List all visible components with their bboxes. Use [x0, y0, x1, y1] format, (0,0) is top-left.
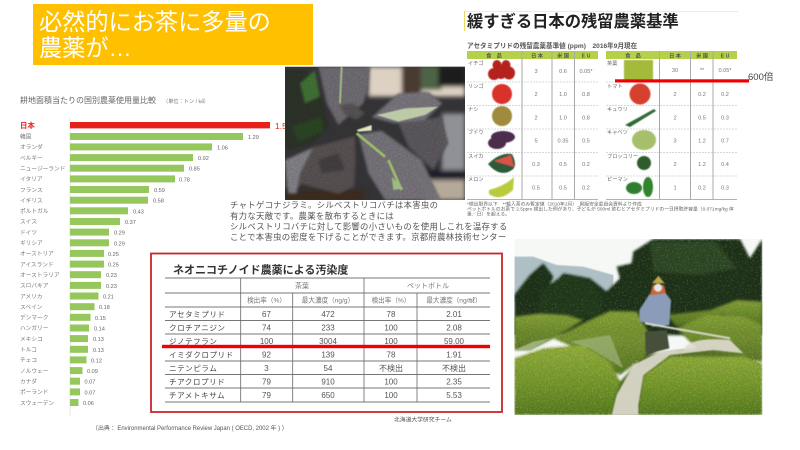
left table: fruit: 食 品 — [486, 52, 502, 60]
residue standards heading: 緩すぎる日本の残留農薬基準 — [467, 12, 679, 31]
column headers — [247, 281, 482, 304]
bars: other countries: オランダ — [20, 143, 43, 151]
left table: fruit: 2 — [534, 116, 538, 122]
table rows: 100 — [384, 324, 398, 332]
table rows: 3004 — [319, 337, 337, 346]
bars: other countries: 韓国 — [20, 132, 32, 140]
bars: other countries: スペイン — [20, 304, 43, 311]
table rows: 100 — [260, 337, 274, 346]
table footnote: *検出限界以下 **輸入茶のみ暫定値（2010年2月） 県版安全委員会資料より作成 — [467, 200, 642, 208]
right table: vegetables and tea: 0.2 — [698, 92, 706, 98]
table rows: 不検出 — [442, 363, 466, 373]
right table: vegetables and tea: キャベツ — [607, 129, 628, 136]
bars: other countries: 0.29 — [114, 241, 125, 247]
bar: Japan: 1.5 — [275, 121, 287, 131]
right table: vegetables and tea: 日 本 — [669, 52, 682, 60]
left table: fruit: 米 国 — [557, 52, 569, 60]
table rows: ニテンピラム — [169, 364, 217, 373]
bars: other countries: イギリス — [20, 197, 43, 204]
left table: fruit: ブドウ — [468, 128, 484, 136]
right table: vegetables and tea: 米 国 — [696, 52, 708, 60]
right table: vegetables and tea: 0.4 — [721, 162, 729, 168]
table rows: 100 — [384, 378, 398, 386]
right table: vegetables and tea: トマト — [607, 83, 623, 90]
bars: other countries: 1.06 — [217, 145, 228, 151]
left table: fruit: 0.2 — [582, 186, 590, 192]
left table: fruit: 0.5 — [582, 138, 590, 144]
left table: fruit: 1.0 — [559, 116, 567, 122]
residue standards table — [467, 41, 737, 218]
bars: other countries: スウェーデン — [20, 399, 54, 407]
bars: other countries: 0.78 — [179, 177, 190, 183]
photo caption — [230, 200, 508, 242]
bars: other countries: 0.14 — [94, 326, 105, 332]
photo caption: シルベストリコバチに対して影響の小さいものを使用しこれを温存する — [230, 222, 508, 232]
icons: fruit — [488, 60, 515, 197]
table footnote — [467, 200, 734, 218]
bars: other countries: オーストラリア — [20, 272, 60, 279]
chart heading — [20, 95, 209, 105]
bars: other countries: 0.13 — [93, 337, 104, 343]
right table: vegetables and tea: 0.3 — [721, 186, 729, 192]
bars: other countries: フランス — [20, 187, 43, 194]
right table: vegetables and tea: キュウリ — [607, 105, 628, 113]
bars: other countries: ポーランド — [20, 388, 48, 396]
right table: vegetables and tea: 3 — [673, 138, 677, 144]
left table: fruit: 0.5 — [559, 186, 567, 192]
left table: fruit: スイカ — [468, 153, 484, 160]
table rows: 3 — [264, 364, 269, 373]
left table: fruit: 0.8 — [582, 92, 590, 98]
right table: vegetables and tea: ブロッコリー — [607, 152, 638, 160]
table rows: 92 — [262, 350, 271, 360]
residue standards table: アセタミプリドの残留農薬基準値 (ppm) 2016年9月現在 — [467, 41, 638, 50]
photo caption: チャトゲコナジラミ。シルベストリコバチは本害虫の — [230, 200, 438, 210]
bars: other countries: 0.25 — [108, 252, 119, 258]
bars: other countries: ポルトガル — [20, 207, 49, 215]
chart heading: （単位：トン / ㎢） — [163, 97, 209, 105]
column headers: 茶葉 — [295, 281, 309, 290]
title banner — [33, 4, 313, 65]
left table: fruit: メロン — [468, 177, 484, 183]
bars: other countries: 0.12 — [91, 358, 102, 364]
table rows: 472 — [321, 310, 335, 319]
table rows: 2.35 — [446, 378, 462, 386]
bars: other countries: 0.23 — [106, 273, 117, 279]
neonicotinoid contamination table — [151, 254, 502, 412]
left table: fruit: 3 — [534, 69, 538, 75]
table rows: 233 — [321, 324, 335, 332]
right table: vegetables and tea: 茶葉 — [607, 59, 618, 67]
table rows: 1.91 — [446, 350, 462, 360]
left table: fruit: E U — [582, 54, 591, 60]
bars: other countries: ドイツ — [20, 230, 37, 236]
bars: other countries: スロバキア — [20, 283, 49, 290]
table rows: アセタミプリド — [169, 310, 226, 319]
photo caption: 有力な天敵です。農薬を散布するときには — [230, 211, 394, 221]
right table: vegetables and tea: 2 — [673, 116, 677, 122]
bars: other countries — [20, 132, 259, 407]
left table: fruit: ナシ — [468, 106, 478, 113]
left table: fruit: 0.2 — [582, 162, 590, 168]
left table: fruit: 0.3 — [532, 162, 540, 168]
table rows: 54 — [324, 364, 333, 373]
right table: vegetables and tea: ** — [700, 68, 705, 74]
right table: vegetables and tea: 1.2 — [698, 162, 706, 168]
table rows: 139 — [321, 350, 335, 360]
left table: fruit: 5 — [534, 138, 538, 144]
right table: vegetables and tea: 0.2 — [721, 92, 729, 98]
bars: other countries: 0.85 — [189, 167, 200, 173]
table rows: 100 — [384, 391, 398, 400]
table source: 北海道大学研究チーム — [394, 416, 452, 424]
highlight line: tea 600x: 600倍 — [748, 71, 774, 83]
table rows: 59.00 — [444, 337, 465, 346]
table rows: 78 — [387, 310, 396, 319]
right table: vegetables and tea: 0.3 — [721, 116, 729, 122]
bars: other countries: 0.23 — [106, 284, 117, 290]
table rows: 67 — [262, 310, 271, 319]
column headers: 最大濃度（ng/g） — [302, 296, 354, 304]
bars: other countries: イタリア — [20, 175, 43, 183]
bars: other countries: ギリシア — [20, 240, 43, 247]
column headers: 最大濃度（ng/㎖） — [426, 296, 482, 304]
table rows: 100 — [384, 337, 398, 346]
left table: fruit: リンゴ — [468, 82, 484, 90]
title banner: 必然的にお茶に多量の — [39, 9, 271, 35]
bars: other countries: 0.43 — [133, 209, 144, 215]
table heading: ネオニコチノイド農薬による汚染度 — [173, 262, 348, 276]
highlight line: tea 600x — [615, 71, 774, 83]
bars: other countries: 0.21 — [103, 294, 114, 300]
bars: other countries: 0.06 — [83, 401, 94, 407]
left table: fruit: 日 本 — [531, 52, 544, 60]
right table: vegetables and tea: 1 — [673, 186, 677, 192]
left table: fruit: 1.0 — [559, 92, 567, 98]
left table: fruit: 0.5 — [559, 162, 567, 168]
bars: other countries: トルコ — [20, 346, 37, 354]
bar: Japan — [20, 121, 287, 131]
table footnote: 重／日）を超える。 — [467, 210, 510, 218]
bars: other countries: ベルギー — [20, 155, 43, 162]
bars: other countries: 0.25 — [108, 263, 119, 269]
table rows: 78 — [387, 350, 396, 360]
right table: vegetables and tea: 1.2 — [698, 138, 706, 144]
bars: other countries: メキシコ — [20, 336, 43, 343]
table rows: クロチアニジン — [169, 324, 226, 332]
bars: other countries: 0.09 — [87, 369, 98, 375]
column headers: 検出率（%） — [372, 296, 410, 304]
bars: other countries: アイスランド — [20, 261, 54, 268]
table rows: 74 — [262, 324, 271, 332]
left table: fruit: 0.6 — [559, 69, 567, 75]
right table: vegetables and tea: 0.7 — [721, 138, 729, 144]
bars: other countries: 1.29 — [248, 135, 259, 141]
bars: other countries: ニュージーランド — [20, 166, 65, 172]
table rows: 5.53 — [446, 391, 462, 400]
right table: vegetables and tea: E U — [721, 54, 730, 60]
left table: fruit: 0.5 — [532, 186, 540, 192]
bars: other countries: アメリカ — [20, 293, 42, 300]
bar: Japan: 日本 — [20, 121, 35, 130]
left table: fruit: 0.05* — [579, 69, 593, 75]
right table: vegetables and tea: 食 品 — [625, 52, 641, 60]
table rows: チアクロプリド — [169, 378, 225, 386]
right table: vegetables and tea: 2 — [673, 162, 677, 168]
bars: other countries: 0.58 — [153, 199, 164, 205]
photo caption: ことで本害虫の密度を下げることができます。京都府農林技術センター — [230, 232, 507, 242]
left table: fruit: 2 — [534, 92, 538, 98]
table rows: チアメトキサム — [169, 391, 225, 400]
table rows: 650 — [321, 391, 335, 400]
column headers: 検出率（%） — [247, 296, 286, 304]
table rows: 79 — [262, 378, 271, 386]
bars: other countries: 0.59 — [154, 188, 165, 194]
bars: other countries: オーストリア — [20, 251, 54, 258]
table rows: 2.08 — [446, 324, 462, 332]
table rows — [169, 310, 466, 400]
left table: fruit: 0.8 — [582, 116, 590, 122]
photo: leaves covered in sooty mould — [285, 67, 465, 200]
left table: fruit — [467, 51, 598, 200]
bars: other countries: 0.07 — [84, 380, 95, 386]
bars: other countries: チェコ — [20, 357, 37, 364]
chart source: （出典： Environmental Performance Review Japan ( OECD, 2002 年 ) ） — [92, 424, 288, 432]
bars: other countries: 0.37 — [125, 220, 136, 226]
bars: other countries: 0.13 — [93, 348, 104, 354]
table footnote: ペットボトルのお茶で 2.5ppm 検出した例があり、子どもが 500ml 飲むとアセタミプリドの一日摂取許容量（0.071mg/kg 体 — [467, 206, 734, 212]
bars: other countries: ノルウェー — [20, 367, 49, 375]
right table: vegetables and tea: 30 — [672, 68, 678, 74]
table rows: 不検出 — [379, 363, 403, 373]
bars: other countries: カナダ — [20, 378, 37, 386]
chart heading: 耕地面積当たりの国別農薬使用量比較 — [20, 95, 156, 105]
bars: other countries: スイス — [20, 219, 37, 226]
bar chart: pesticide use by country — [20, 95, 288, 432]
right table: vegetables and tea: 0.5 — [698, 116, 706, 122]
bars: other countries: 0.18 — [99, 305, 110, 311]
farmer — [645, 330, 669, 357]
bars: other countries: 0.92 — [198, 156, 209, 162]
table rows: 79 — [262, 391, 271, 400]
right table: vegetables and tea: ピーマン — [607, 176, 628, 183]
title banner: 農薬が… — [39, 35, 132, 61]
photo: farmer spraying tea bushes — [514, 239, 762, 415]
table rows: 910 — [321, 378, 335, 386]
bars: other countries: 0.29 — [114, 231, 125, 237]
table rows: イミダクロプリド — [169, 350, 234, 360]
bars: other countries: デンマーク — [20, 314, 48, 322]
left table: fruit: イチゴ — [468, 59, 484, 67]
bars: other countries: 0.15 — [95, 316, 106, 322]
right table: vegetables and tea: 2 — [673, 92, 677, 98]
bars: other countries: ハンガリー — [20, 324, 49, 332]
left table: fruit: 0.35 — [558, 138, 568, 144]
bars: other countries: 0.07 — [84, 390, 95, 396]
column headers: ペットボトル — [407, 282, 449, 290]
right table: vegetables and tea — [606, 51, 737, 200]
highlight line: dinotefuran — [162, 345, 490, 348]
right table: vegetables and tea: 0.2 — [698, 186, 706, 192]
table rows: ジノテフラン — [169, 337, 217, 346]
right table: vegetables and tea: 0.05* — [718, 68, 732, 74]
icons: vegetables — [624, 60, 656, 197]
table rows: 2.01 — [446, 310, 462, 319]
